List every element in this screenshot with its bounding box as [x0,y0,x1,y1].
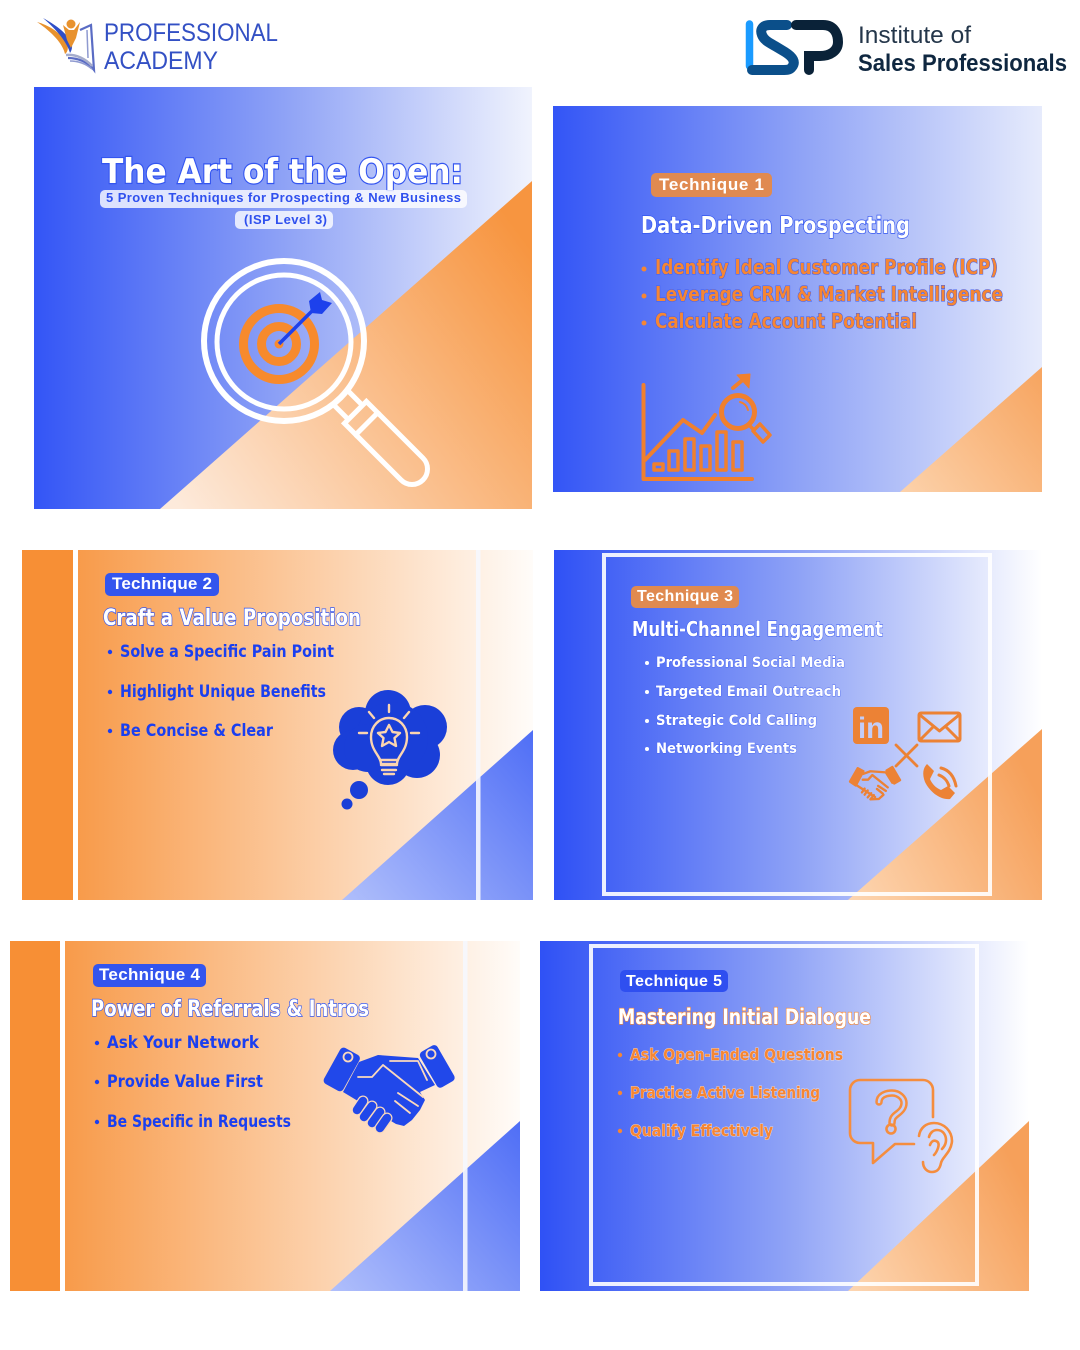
title: The Art of the Open: [102,152,463,192]
badge: technique 1 [651,173,772,197]
bullet list: Identify Ideal Customer Profile (ICP) [655,255,998,279]
icon: channels: in [858,712,884,745]
logo: Professional Academy: ACADEMY [104,47,218,75]
bullet list [95,1033,291,1132]
panel: technique 2 [22,550,533,900]
panel: title slide [34,87,532,509]
logo: Institute of Sales Professionals: Sales Professionals [858,50,1067,77]
badge: technique 5 [620,970,728,992]
bullet list: Professional Social Media [656,655,845,671]
heading: Craft a Value Proposition [103,606,361,631]
bullet list: Ask Open-Ended Questions [630,1045,843,1064]
bullet list [108,642,334,741]
heading: Multi-Channel Engagement [632,617,883,641]
subtitle: 5 Proven Techniques for Prospecting & New Business [106,190,461,205]
badge: technique 4: Technique 4 [99,965,201,984]
bullet list [618,1045,843,1140]
panel: technique 5 [540,941,1029,1291]
icon: channels [850,707,960,799]
bullet list [645,655,845,757]
panel: technique 1 [553,106,1042,492]
panel: technique 3 [554,550,1042,900]
logo: Institute of Sales Professionals: Institute of [858,22,971,49]
logo: Institute of Sales Professionals [750,22,1067,77]
subtitle: (ISP Level 3) [244,212,327,227]
bullet list: Targeted Email Outreach [656,684,841,700]
bullet list: Networking Events [656,741,797,757]
badge: technique 3 [631,586,739,608]
bullet list: Practice Active Listening [630,1083,820,1102]
bullet list: Be Concise & Clear [120,721,274,741]
bullet list: Provide Value First [107,1072,263,1092]
icon: handshake [322,1044,456,1128]
bullet list: Leverage CRM & Market Intelligence [655,282,1003,306]
bullet list: Be Specific in Requests [107,1112,291,1132]
heading: Data-Driven Prospecting [641,213,910,239]
badge: technique 5: Technique 5 [626,973,722,990]
icon: magnifier with target [204,261,434,491]
bullet list: Calculate Account Potential [655,309,917,333]
bullet list [642,255,1003,333]
badge: technique 1: Technique 1 [659,175,764,194]
bullet list: Strategic Cold Calling [656,713,817,729]
subtitle [100,190,467,229]
bullet list: Qualify Effectively [630,1121,773,1140]
panel: technique 4 [10,941,520,1291]
icon: thought bubble with light bulb [333,690,447,810]
logo: Professional Academy [37,18,278,75]
bullet list: Highlight Unique Benefits [120,682,326,702]
badge: technique 3: Technique 3 [637,588,733,605]
badge: technique 2: Technique 2 [112,574,212,593]
logo: Professional Academy: PROFESSIONAL [104,19,278,47]
bullet list: Ask Your Network [107,1033,260,1053]
icon: question bubble and ear [850,1080,952,1172]
icon: chart with magnifier [644,374,770,479]
heading: Mastering Initial Dialogue [618,1005,871,1029]
bullet list: Solve a Specific Pain Point [120,642,334,662]
heading: Power of Referrals & Intros [91,997,369,1022]
